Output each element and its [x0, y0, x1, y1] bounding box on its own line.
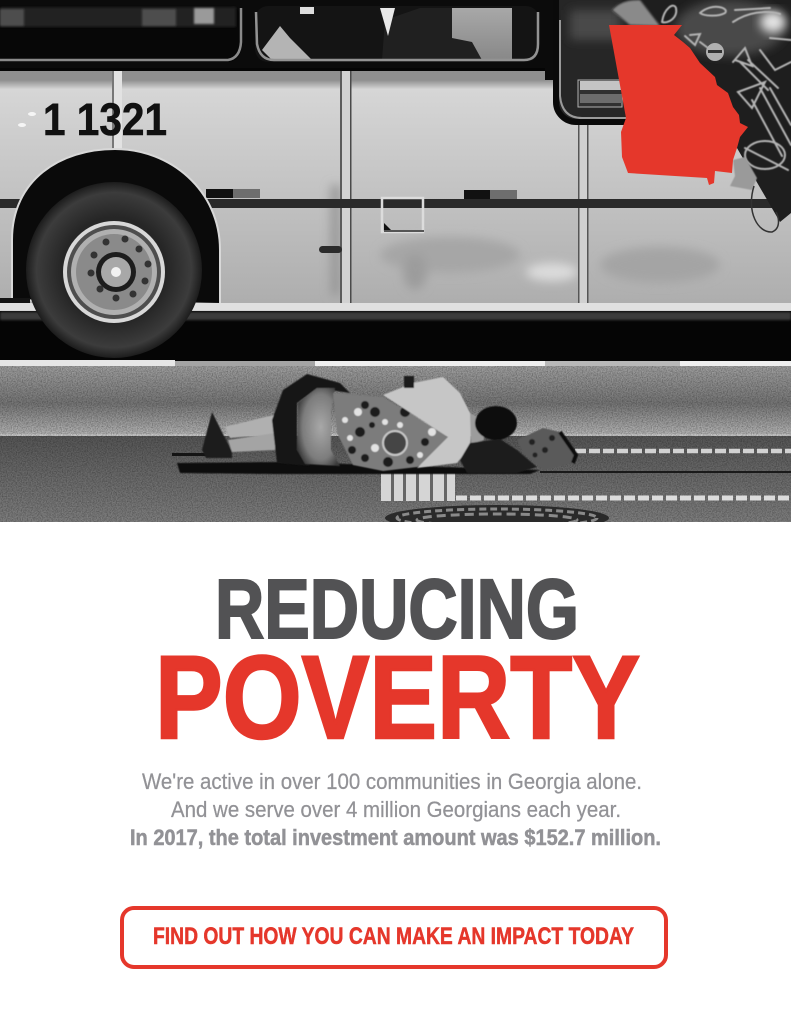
title — [155, 562, 640, 764]
left window — [0, 6, 241, 62]
graffiti scribbles — [662, 6, 791, 170]
wheel arch — [12, 149, 220, 304]
surface grain — [0, 366, 791, 522]
bus number: 1 1321 — [43, 94, 167, 145]
door seams — [114, 71, 122, 148]
bare back — [297, 388, 340, 466]
pale kerb line — [0, 360, 791, 366]
person shadow — [172, 453, 540, 474]
rear window frame — [545, 71, 553, 80]
manhole cover — [385, 505, 609, 522]
wheel — [26, 182, 202, 358]
icon: red map of Georgia — [609, 25, 748, 185]
small black marker plates — [206, 189, 517, 199]
body text: In 2017, the total investment amount was $152.7 million. — [130, 825, 661, 850]
dents near number — [18, 112, 36, 127]
body text: And we serve over 4 million Georgians each year. — [171, 797, 621, 822]
pale top — [383, 377, 472, 468]
dark skirt — [272, 374, 350, 466]
patterned shirt — [333, 393, 448, 471]
pale seam under the window strip — [0, 68, 560, 71]
hatch — [382, 198, 424, 232]
right window with passengers — [255, 6, 539, 62]
button badge — [706, 43, 724, 61]
hair — [475, 406, 517, 440]
photo: person lying on the pavement beside a bus — [0, 0, 791, 531]
bus window strip — [0, 0, 545, 68]
body text: We're active in over 100 communities in Georgia alone. — [142, 769, 642, 794]
body text — [130, 769, 661, 850]
mirror sheen — [675, 0, 785, 56]
title line: poverty: POVERTY — [155, 632, 640, 764]
bus soft panel reflections — [331, 185, 720, 295]
hanging cable — [751, 186, 778, 232]
skirt below left panel — [0, 298, 30, 303]
asphalt road — [0, 366, 791, 434]
dark horizontal stripe — [0, 199, 791, 208]
tactile paving — [381, 451, 791, 501]
road band below bus — [0, 303, 791, 361]
legs — [225, 415, 275, 438]
pavement — [0, 434, 791, 522]
crumpled tape — [730, 157, 757, 190]
call to action button: FIND OUT HOW YOU CAN MAKE AN IMPACT TODAY — [153, 923, 634, 950]
mirror top-left light patch — [612, 0, 660, 26]
title line: reducing: REDUCING — [215, 562, 579, 656]
stickered bus mirror — [612, 0, 791, 232]
bus body — [0, 0, 791, 310]
handle — [319, 246, 342, 253]
mirror glare — [760, 11, 786, 33]
call to action button — [122, 908, 666, 967]
bag — [460, 439, 537, 473]
person lying down — [202, 374, 576, 473]
